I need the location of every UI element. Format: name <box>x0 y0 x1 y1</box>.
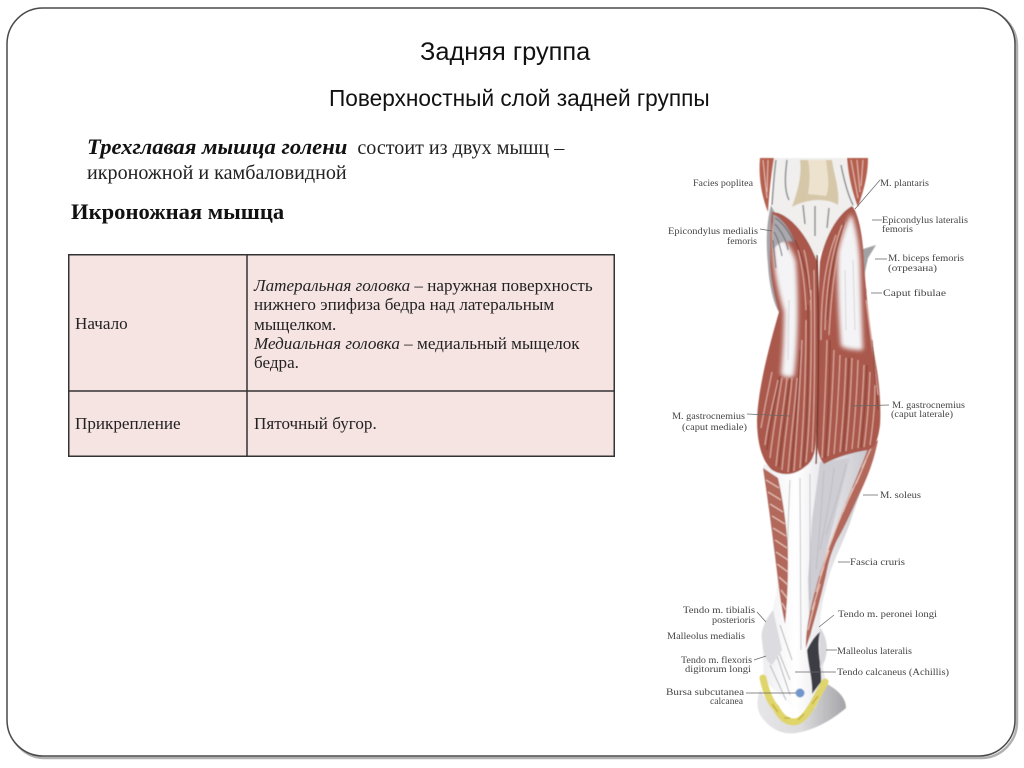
labels: Bursa subcutanea <box>666 687 745 698</box>
medial tendon sheet <box>773 222 798 377</box>
cell: origin description: Медиальная головка – медиальный мыщелок <box>254 334 580 353</box>
labels: Epicondylus medialis <box>668 226 758 237</box>
labels: Fascia cruris <box>850 557 905 568</box>
labels: calcanea <box>710 696 744 707</box>
labels: Tendo m. tibialis <box>683 605 755 616</box>
title: Задняя группа <box>420 38 590 66</box>
upper thigh muscles <box>760 158 774 212</box>
cell: insertion description: Пяточный бугор. <box>254 414 377 433</box>
labels: posterioris <box>712 615 755 626</box>
lower leg base <box>762 442 875 715</box>
intro text: Трехглавая мышца голени состоит из двух мышц – <box>87 134 564 159</box>
medial tendon grey shading <box>773 214 794 250</box>
labels: digitorum longi <box>685 664 751 675</box>
cell: origin description: мыщелком. <box>254 315 336 334</box>
row label: origin: Начало <box>75 314 128 333</box>
labels: (caput laterale) <box>891 409 953 420</box>
labels <box>666 178 968 707</box>
table: gastrocnemius <box>68 254 615 457</box>
labels: Tendo calcaneus (Achillis) <box>837 667 949 678</box>
heel <box>757 684 846 733</box>
gastrocnemius medial head <box>757 212 818 474</box>
labels: Malleolus lateralis <box>837 646 912 657</box>
labels: Tendo m. flexoris <box>681 655 752 666</box>
intro text <box>87 134 564 184</box>
lateral tendon sheet <box>838 214 863 350</box>
labels: M. biceps femoris <box>888 253 964 264</box>
labels: Tendo m. peronei longi <box>838 609 937 620</box>
labels: Epicondylus lateralis <box>882 215 968 226</box>
labels: M. soleus <box>880 490 921 501</box>
intro text: икроножной и камбаловидной <box>87 162 347 184</box>
labels: Facies poplitea <box>693 178 754 189</box>
soleus right strip <box>806 440 878 648</box>
bursa <box>796 688 804 698</box>
labels: (отрезана) <box>888 263 937 274</box>
labels: Malleolus medialis <box>667 631 745 642</box>
labels: femoris <box>882 224 913 235</box>
calcaneal fat pad <box>763 678 825 722</box>
labels: Caput fibulae <box>883 288 946 299</box>
labels: M. gastrocnemius <box>892 400 965 411</box>
soleus left strip <box>763 468 788 624</box>
labels: M. plantaris <box>880 178 929 189</box>
cell: origin description: Латеральная головка – наружная поверхность <box>254 276 593 295</box>
labels: M. gastrocnemius <box>672 411 745 422</box>
section heading: Икроножная мышца <box>71 199 284 224</box>
cell: origin description: бедра. <box>254 353 299 372</box>
subtitle: Поверхностный слой задней группы <box>329 85 710 111</box>
labels: femoris <box>727 236 757 247</box>
medial epicondyle tendon <box>767 205 779 312</box>
biceps femoris stump and fibular head <box>858 245 876 288</box>
leader lines <box>746 180 889 693</box>
labels: (caput mediale) <box>682 422 747 433</box>
cell: origin description <box>254 276 593 372</box>
fine tendon marks <box>773 218 794 268</box>
popliteal fossa and bone <box>772 158 856 258</box>
malleoli <box>762 610 782 665</box>
row label: insertion: Прикрепление <box>75 414 181 433</box>
gastrocnemius lateral head <box>817 206 880 464</box>
muscle fibres: lateral <box>821 222 878 458</box>
cell: origin description: нижнего эпифиза бедра над латеральным <box>254 295 554 314</box>
muscle fibres: medial <box>761 250 815 472</box>
achilles shadow <box>807 632 821 694</box>
